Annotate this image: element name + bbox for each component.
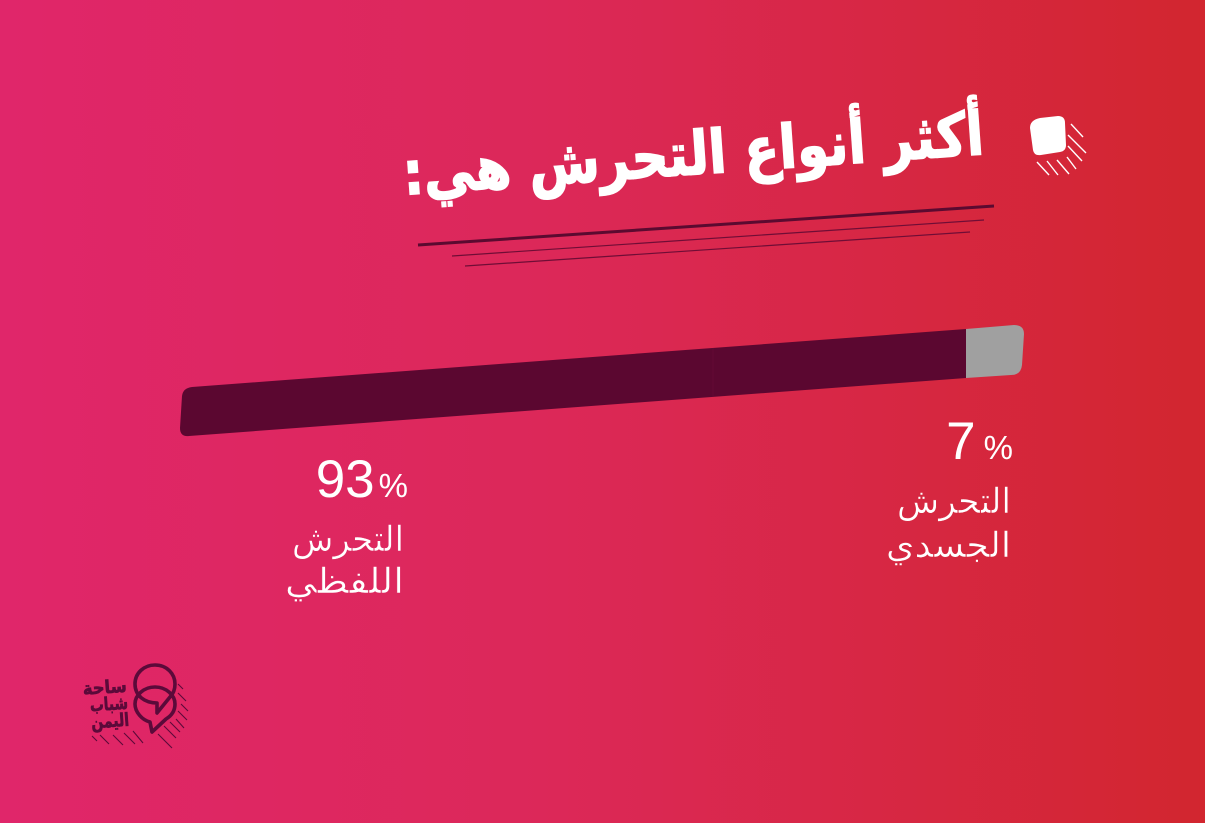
label: verbal harassment: [285, 520, 404, 602]
logo: hatching: [92, 684, 188, 748]
logo: wordmark: [82, 676, 130, 734]
bar segment: physical harassment 7%: [966, 325, 1024, 378]
title: أكثر أنواع التحرش هي:: [400, 94, 986, 210]
label: 93 percent: 93%: [316, 450, 408, 509]
logo: wordmark: ساحة: [82, 676, 127, 700]
logo: speech bubbles: [135, 665, 175, 732]
label: 7 percent: 7%: [946, 412, 1013, 471]
label: physical harassment: الجسدي: [886, 526, 1011, 566]
logo: wordmark: شباب: [89, 693, 129, 716]
label: physical harassment: التحرش: [897, 482, 1011, 522]
logo: [82, 665, 188, 748]
icon: rounded square with hatching: [1030, 116, 1086, 175]
stacked bar chart: [180, 325, 1024, 436]
label: verbal harassment: التحرش: [292, 520, 404, 560]
title underlines: [418, 206, 994, 266]
label: verbal harassment: اللفظي: [285, 562, 404, 602]
bar segment: verbal harassment 93%: [180, 329, 966, 436]
logo: wordmark: اليمن: [90, 710, 130, 733]
label: physical harassment: [886, 482, 1011, 566]
